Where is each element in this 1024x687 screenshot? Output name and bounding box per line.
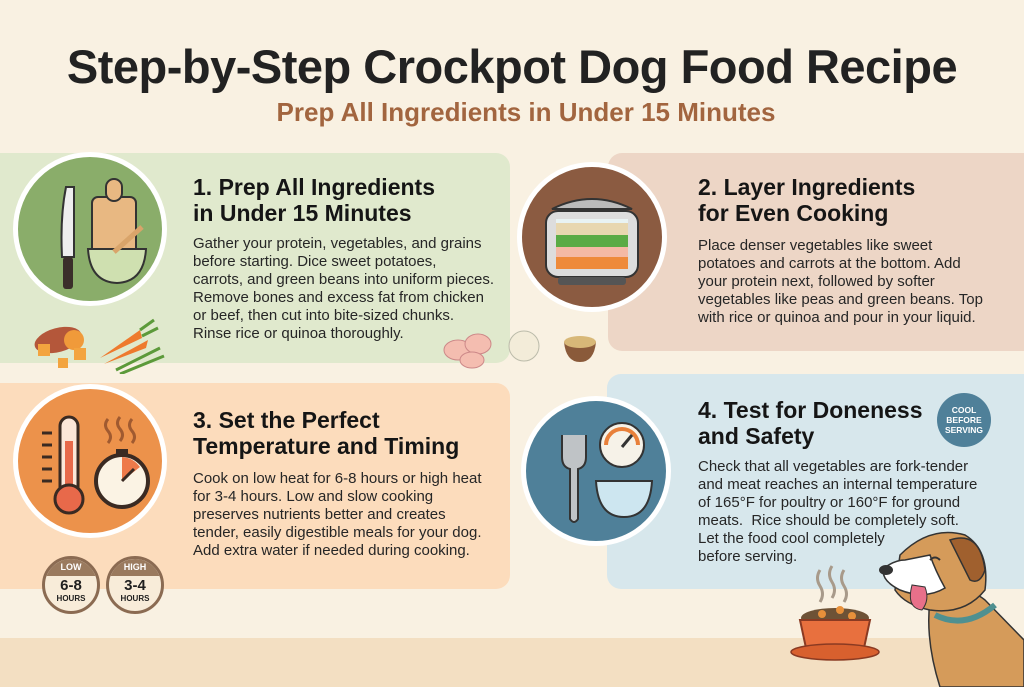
heading: step 4: 4. Test for Doneness (698, 397, 923, 423)
heading: step 2: for Even Cooking (698, 200, 888, 226)
panel: step 3 (0, 383, 510, 589)
callout: cool before serving: SERVING (945, 425, 983, 435)
badge: low: HOURS (57, 594, 85, 603)
badge: high: 3-4 (124, 577, 146, 594)
text: step 3: tender, easily digestible meals for your dog. (193, 524, 482, 541)
text: step 2 (698, 237, 983, 326)
icon: doneness (521, 396, 671, 546)
title: Step-by-Step Crockpot Dog Food Recipe (67, 40, 957, 93)
callout: cool before serving: BEFORE (946, 415, 982, 425)
text: step 4: before serving. (698, 548, 797, 565)
text: step 1: Remove bones and excess fat from chicken (193, 289, 484, 306)
text: step 2: potatoes and carrots at the bottom. Add (698, 255, 961, 272)
bottom band (0, 638, 1024, 687)
badge: high: HIGH (124, 562, 146, 572)
text: step 2: with rice or quinoa and pour in your liquid. (698, 309, 976, 326)
panel: step 1 (0, 153, 510, 363)
icon: temperature (13, 384, 167, 538)
callout: cool before serving: COOL (952, 405, 976, 415)
badge: low: LOW (60, 562, 82, 572)
badge: high (106, 556, 164, 614)
heading: step 1 (193, 174, 435, 226)
text: step 2: Place denser vegetables like sweet (698, 237, 932, 254)
heading: step 3: 3. Set the Perfect (193, 407, 380, 433)
panel: step 2 (608, 153, 1024, 351)
panel: step 4 (607, 374, 1024, 589)
text: step 4: meats. Rice should be completely soft. (698, 512, 959, 529)
text: step 1: before starting. Dice sweet potatoes, (193, 253, 436, 270)
heading: step 3 (193, 407, 459, 459)
text: step 2: your protein next, followed by softer (698, 273, 935, 290)
icon: crockpot (517, 162, 667, 312)
text: step 3: for 3-4 hours. Low and slow cooking (193, 488, 433, 505)
text: step 1: Rinse rice or quinoa thoroughly. (193, 325, 404, 342)
text: step 3 (193, 470, 482, 559)
text: step 3: Add extra water if needed during cooking. (193, 542, 470, 559)
heading: step 3: Temperature and Timing (193, 433, 459, 459)
text: step 2: vegetables like peas and green beans. Top (698, 291, 983, 308)
icon: protein and grains (444, 330, 596, 368)
text: step 1: carrots, and green beans into uniform pieces. (193, 271, 494, 288)
heading: step 1: in Under 15 Minutes (193, 200, 412, 226)
icon: vegetables (34, 318, 164, 374)
text: step 1: or beef, then cut into bite-sized chunks. (193, 307, 454, 324)
text: step 4: Let the food cool completely (698, 530, 885, 547)
heading: step 4 (698, 397, 923, 449)
text: step 1 (193, 235, 494, 342)
badge: high: HOURS (121, 594, 149, 603)
icon: dog with bowl (790, 532, 1024, 687)
text: step 3: preserves nutrients better and creates (193, 506, 446, 523)
heading: step 2 (698, 174, 915, 226)
icon: prep tools (13, 152, 167, 306)
text: step 4: Check that all vegetables are fork-tender (698, 458, 968, 475)
badge: low (42, 556, 100, 614)
text: step 4 (698, 458, 977, 565)
subtitle: Prep All Ingredients in Under 15 Minutes (277, 97, 775, 127)
heading: step 2: 2. Layer Ingredients (698, 174, 915, 200)
text: step 1: Gather your protein, vegetables, and grains (193, 235, 482, 252)
text: step 3: Cook on low heat for 6-8 hours or high heat (193, 470, 482, 487)
text: step 4: of 165°F for poultry or 160°F for ground (698, 494, 960, 511)
text: step 4: and meat reaches an internal temperature (698, 476, 977, 493)
badge: low: 6-8 (60, 577, 82, 594)
heading: step 1: 1. Prep All Ingredients (193, 174, 435, 200)
callout: cool before serving (937, 393, 991, 447)
heading: step 4: and Safety (698, 423, 814, 449)
